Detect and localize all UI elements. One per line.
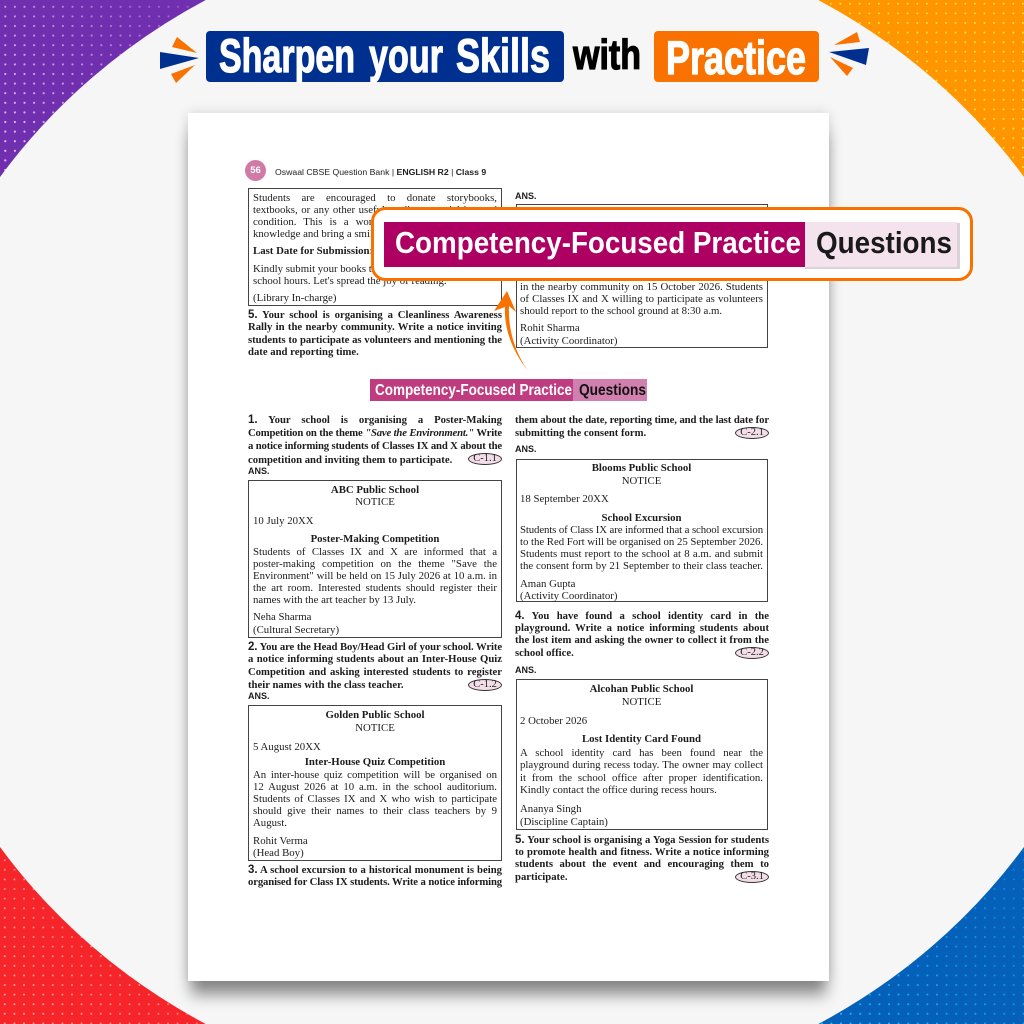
notice: ABC Public School: Poster-Making Competition: [311, 533, 439, 545]
question 3 continued: [515, 414, 769, 439]
answer label 3: ANS.: [515, 444, 537, 454]
question 1: competition and inviting them to participate.: [248, 454, 452, 466]
notice: Blooms Public School: the consent form by 21 September to their class teacher.: [520, 560, 763, 572]
question 5 bottom: students about the event and encouraging them to: [515, 858, 769, 870]
notice: Alcohan Public School: (Discipline Captain): [520, 816, 608, 828]
icon: right spark: [829, 32, 869, 76]
notice: Blooms Public School: 18 September 20XX: [520, 493, 609, 505]
notice: Blooms Public School: Students must report to the school at 8 a.m. and submit: [520, 548, 763, 560]
notice: ABC Public School: Environment" will be held on 15 July 2026 at 10 a.m. in: [253, 570, 497, 582]
panel: book page: [188, 113, 829, 981]
question 1: 1. Your school is organising a Poster-Making: [248, 414, 502, 426]
notice: Alcohan Public School: [516, 679, 768, 830]
competency tag C-1.1: C-1.1: [473, 453, 497, 464]
notice continuation box: Kindly submit your books to the library during: [253, 263, 455, 275]
question 5 bottom: 5. Your school is organising a Yoga Session for students: [515, 834, 769, 846]
notice: ABC Public School: Students of Classes IX and X are informed that a: [253, 546, 497, 558]
competency tag C-2.1: [735, 427, 769, 439]
competency tag C-2.1: C-2.1: [740, 427, 764, 438]
notice: ABC Public School: poster-making competition on the theme "Save the: [253, 558, 497, 570]
notice: ABC Public School: (Cultural Secretary): [253, 624, 339, 636]
notice: Alcohan Public School: Ananya Singh: [520, 803, 581, 815]
notice: Golden Public School: NOTICE: [355, 722, 395, 734]
notice: Golden Public School: Students of Classes IX and X who wish to participate: [253, 793, 497, 805]
notice box top right: should report to the school ground at 8:30 a.m.: [520, 305, 722, 317]
question 1: Competition on the theme "Save the Environment." Write: [248, 427, 502, 439]
section heading: [370, 379, 647, 401]
notice: ABC Public School: 10 July 20XX: [253, 515, 314, 527]
notice: Alcohan Public School: Lost Identity Card Found: [582, 733, 701, 745]
notice: Alcohan Public School: it from the school office after proper identification.: [520, 772, 763, 784]
notice box top right: of Classes IX and X willing to participate as volunteers: [520, 293, 763, 305]
notice continuation box: knowledge and bring a smile to a child's face.: [253, 228, 450, 240]
notice: Blooms Public School: Students of Class IX are informed that a school excursion: [520, 524, 763, 536]
question 4: 4. You have found a school identity card in the: [515, 610, 769, 622]
question 3: organised for Class IX students. Write a notice informing: [248, 876, 502, 888]
competency tag C-1.1: [468, 453, 502, 465]
question 5 bottom: [515, 834, 769, 883]
question 2: their names with the class teacher.: [248, 679, 404, 691]
notice continuation box: textbooks, or any other useful reading material in good: [253, 204, 497, 216]
notice: Alcohan Public School: Alcohan Public School: [590, 683, 693, 695]
notice: Alcohan Public School: A school identity card has been found near the: [520, 747, 763, 759]
notice continuation box: condition. This is a wonderful way to share your: [253, 216, 497, 228]
callout: enlarged heading: Competency-Focused Practice: [395, 225, 801, 260]
answer label 2: ANS.: [248, 691, 270, 701]
question 4: the lost item and asking the owner to collect it from the: [515, 634, 769, 646]
notice: ABC Public School: Neha Sharma: [253, 611, 311, 623]
section heading: Competency-Focused Practice: [375, 382, 572, 399]
answer label 1: ANS.: [248, 466, 270, 476]
notice continuation box: Last Date for Submission:: [253, 245, 373, 257]
question 2: a notice informing students about an Inter-House Quiz: [248, 653, 502, 665]
notice continuation box: school hours. Let's spread the joy of reading.: [253, 275, 447, 287]
notice: Golden Public School: Inter-House Quiz Competition: [305, 756, 445, 768]
title banner: [160, 29, 869, 84]
question 5 top: date and reporting time.: [248, 346, 359, 358]
notice: Golden Public School: [248, 705, 502, 861]
title: with: with: [572, 31, 641, 78]
notice: Alcohan Public School: 2 October 2026: [520, 715, 587, 727]
notice: Blooms Public School: NOTICE: [622, 475, 661, 487]
question 5 bottom: to promote health and fitness. Write a notice informing: [515, 846, 769, 858]
callout: enlarged heading: Questions: [816, 225, 952, 260]
notice: Golden Public School: 12 August 2026 at 10 a.m. in the school auditorium.: [253, 781, 497, 793]
notice continuation box: Students are encouraged to donate storybooks,: [253, 192, 497, 204]
title: Sharpen your Skills: your: [369, 29, 443, 82]
title: Sharpen your Skills: Sharpen: [219, 29, 355, 82]
notice: Blooms Public School: (Activity Coordinator): [520, 590, 617, 602]
notice: Golden Public School: An inter-house quiz competition will be organised on: [253, 769, 497, 781]
notice: ABC Public School: [248, 480, 502, 638]
question 3 continued: them about the date, reporting time, and the last date for: [515, 414, 769, 426]
question 5 top: 5. Your school is organising a Cleanliness Awareness: [248, 309, 502, 321]
competency tag C-3.1: C-3.1: [740, 871, 764, 882]
notice: ABC Public School: the art room. Interested students should register their: [253, 582, 497, 594]
notice: Golden Public School: Rohit Verma: [253, 835, 308, 847]
icon: left spark: [160, 37, 199, 83]
notice continuation box: (Library In-charge): [253, 292, 336, 304]
notice box top right: [516, 204, 768, 348]
notice box top right: in the nearby community on 15 October 2026. Students: [520, 281, 763, 293]
question 5 top: students to participate as volunteers and mentioning the: [248, 334, 502, 346]
question 3: 3. A school excursion to a historical monument is being: [248, 864, 502, 876]
notice: Golden Public School: should give their names to their class teachers by 9: [253, 805, 497, 817]
question 5 top: Rally in the nearby community. Write a notice inviting: [248, 321, 502, 333]
question 5 bottom: participate.: [515, 871, 568, 883]
question 3 continued: submitting the consent form.: [515, 427, 646, 439]
competency tag C-1.2: C-1.2: [473, 679, 497, 690]
notice box top right: (Activity Coordinator): [520, 335, 617, 347]
question 4: school office.: [515, 647, 574, 659]
question 4: playground. Write a notice informing students about: [515, 622, 769, 634]
competency tag C-2.2: [735, 647, 769, 659]
notice: Blooms Public School: Blooms Public School: [592, 462, 691, 474]
notice: Blooms Public School: [516, 459, 768, 602]
question 2: [248, 641, 502, 691]
notice: ABC Public School: ABC Public School: [331, 484, 419, 496]
notice: Golden Public School: (Head Boy): [253, 847, 304, 859]
question 2: Competition and asking interested students to register: [248, 666, 502, 678]
title: Sharpen your Skills: Skills: [456, 29, 550, 82]
notice: Blooms Public School: School Excursion: [601, 512, 682, 524]
notice: Alcohan Public School: playground during recess today. The owner may collect: [520, 759, 763, 771]
question 3: [248, 864, 502, 888]
page number badge: 56: [250, 165, 261, 176]
question 1: [248, 414, 502, 466]
notice: Alcohan Public School: NOTICE: [622, 696, 661, 708]
page number badge: [245, 160, 266, 181]
competency tag C-2.2: C-2.2: [740, 647, 764, 658]
title: Sharpen your Skills: [206, 29, 564, 82]
question 2: 2. You are the Head Boy/Head Girl of your school. Write: [248, 641, 502, 653]
question 4: [515, 610, 769, 659]
notice: Blooms Public School: Aman Gupta: [520, 578, 575, 590]
question 1: a notice informing students of Classes IX and X about the: [248, 440, 502, 452]
notice box top right: Rohit Sharma: [520, 322, 580, 334]
notice: ABC Public School: names with the art teacher by 13 July.: [253, 594, 416, 606]
notice: Alcohan Public School: Kindly contact the office during recess hours.: [520, 784, 717, 796]
question 5 top: [248, 309, 502, 358]
notice: Blooms Public School: to the Red Fort will be organised on 25 September 2026.: [520, 536, 763, 548]
notice: Golden Public School: Golden Public School: [326, 709, 424, 721]
arrow: heading to callout: [494, 291, 528, 370]
title: Practice: Practice: [666, 31, 806, 84]
answer label top right: ANS.: [515, 191, 537, 201]
notice: ABC Public School: NOTICE: [355, 496, 395, 508]
competency tag C-1.2: [468, 679, 502, 691]
notice continuation box: [248, 188, 502, 306]
callout: enlarged heading: [371, 207, 973, 281]
notice: Golden Public School: August.: [253, 817, 287, 829]
answer label 4: ANS.: [515, 665, 537, 675]
competency tag C-3.1: [735, 871, 769, 883]
running header: Oswaal CBSE Question Bank | ENGLISH R2 | Class 9: [275, 167, 486, 177]
notice: Golden Public School: 5 August 20XX: [253, 741, 321, 753]
